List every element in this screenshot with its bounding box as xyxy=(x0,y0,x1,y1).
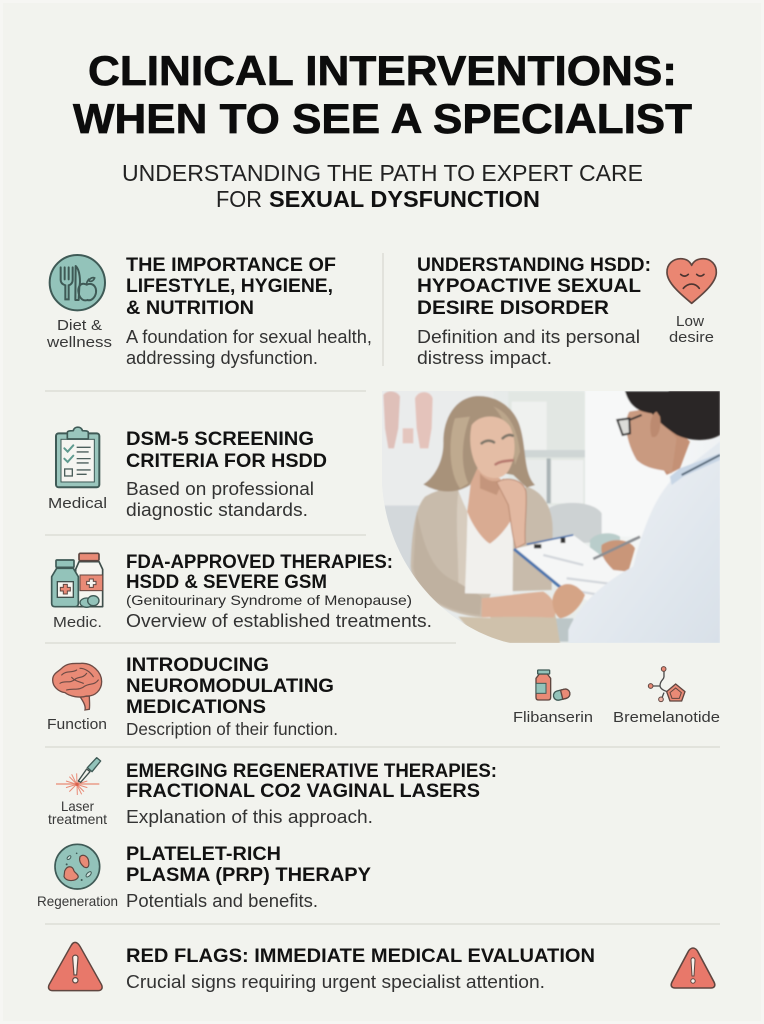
icon label: diet and wellness: Diet & xyxy=(57,318,102,334)
icon: regeneration cell xyxy=(55,844,100,889)
heading: lasers: EMERGING REGENERATIVE THERAPIES: xyxy=(126,761,497,782)
icon: medication bottles xyxy=(52,553,103,607)
panel: FDA-approved therapies xyxy=(52,552,432,631)
panel: red flags xyxy=(49,942,715,992)
label: bremelanotide: Bremelanotide xyxy=(613,710,720,726)
heading: HSDD: UNDERSTANDING HSDD: xyxy=(417,255,651,276)
heading: lifestyle: THE IMPORTANCE OF xyxy=(126,255,336,276)
cardigan xyxy=(411,487,553,617)
text: lasers description: Explanation of this approach. xyxy=(126,807,373,827)
icon label: low desire: desire xyxy=(669,330,714,346)
heading: HSDD: HYPOACTIVE SEXUAL xyxy=(417,276,641,297)
panel: lifestyle, hygiene and nutrition xyxy=(46,255,372,368)
icon label: low desire: Low xyxy=(676,314,705,330)
heading: neuromodulating medications: NEUROMODULATING xyxy=(126,676,334,697)
heading: FDA-approved therapies: FDA-APPROVED THERAPIES: xyxy=(126,552,393,573)
trousers xyxy=(458,612,560,643)
icon label: laser treatment xyxy=(48,798,107,827)
title: WHEN TO SEE A SPECIALIST xyxy=(73,95,692,142)
glasses xyxy=(617,415,642,435)
white top xyxy=(465,512,513,594)
text: DSM-5 description xyxy=(126,479,314,520)
text: HSDD description: Definition and its personal xyxy=(417,327,640,347)
heading: lasers: FRACTIONAL CO2 VAGINAL LASERS xyxy=(126,781,480,802)
heading: lasers xyxy=(126,761,497,802)
panel: neuromodulating medications xyxy=(47,655,720,739)
face xyxy=(470,416,515,478)
icon label: diet and wellness xyxy=(46,318,112,351)
text: lifestyle description: addressing dysfunction. xyxy=(126,348,318,368)
panel: DSM-5 screening criteria xyxy=(48,427,327,520)
heading: FDA-approved therapies: HSDD & SEVERE GSM xyxy=(126,572,327,593)
shadow under chin xyxy=(480,473,504,495)
clipboard xyxy=(516,535,622,600)
subtitle: SEXUAL DYSFUNCTION xyxy=(269,186,540,212)
text: lifestyle description: A foundation for sexual health, xyxy=(126,327,372,347)
text: PRP description: Potentials and benefits. xyxy=(126,891,318,911)
text: FDA description: Overview of established treatments. xyxy=(126,611,432,631)
icon label: medic: Medic. xyxy=(53,615,102,631)
heading: lifestyle xyxy=(126,255,336,319)
doctor hair xyxy=(625,391,720,440)
subtitle: UNDERSTANDING THE PATH TO EXPERT CARE xyxy=(122,160,643,186)
photo: patient consulting with doctor xyxy=(380,385,727,652)
icon label: low desire xyxy=(669,314,714,346)
icon: warning triangle left xyxy=(49,942,102,991)
text: neuromodulating description: Description of their function. xyxy=(126,719,338,739)
text: red flags description: Crucial signs requiring urgent specialist attention. xyxy=(126,972,545,992)
subtitle: FOR xyxy=(216,186,262,212)
neck and chest xyxy=(467,467,513,544)
icon label: medical: Medical xyxy=(48,496,107,512)
heading: DSM-5: DSM-5 SCREENING xyxy=(126,429,314,450)
heading: lifestyle: & NUTRITION xyxy=(126,298,254,319)
heading: PRP xyxy=(126,844,371,886)
text: DSM-5 description: diagnostic standards. xyxy=(126,500,308,520)
text: HSDD description xyxy=(417,327,640,368)
icon: bremelanotide molecule xyxy=(648,667,685,702)
hand on lap xyxy=(482,592,556,618)
text: HSDD description: distress impact. xyxy=(417,348,552,368)
subtitle xyxy=(122,160,643,212)
text: GSM definition: (Genitourinary Syndrome of Menopause) xyxy=(126,592,412,608)
title xyxy=(73,47,692,142)
heading: neuromodulating medications: MEDICATIONS xyxy=(126,697,266,718)
label: flibanserin: Flibanserin xyxy=(513,710,593,726)
doctor's hand and pen xyxy=(601,540,635,572)
panel: understanding HSDD xyxy=(417,255,716,368)
heading: neuromodulating medications: INTRODUCING xyxy=(126,655,269,676)
heading: DSM-5 xyxy=(126,429,327,472)
icon label: function: Function xyxy=(47,717,107,733)
icon: warning triangle right xyxy=(671,948,715,988)
panel: fractional CO2 vaginal lasers xyxy=(48,758,497,827)
icon: flibanserin bottle and capsule xyxy=(536,670,571,701)
icon: clipboard checklist xyxy=(56,427,99,487)
heading: FDA-approved therapies xyxy=(126,552,393,593)
icon: diet and wellness xyxy=(50,255,105,310)
text: DSM-5 description: Based on professional xyxy=(126,479,314,499)
heading: DSM-5: CRITERIA FOR HSDD xyxy=(126,451,327,472)
hair xyxy=(423,396,535,491)
hand under chin xyxy=(497,479,526,548)
icon label: laser treatment: treatment xyxy=(48,811,107,827)
heading: HSDD: DESIRE DISORDER xyxy=(417,298,609,319)
heading: PRP: PLASMA (PRP) THERAPY xyxy=(126,865,371,886)
doctor coat xyxy=(568,442,720,643)
icon: sad heart xyxy=(667,259,716,303)
icon label: regeneration: Regeneration xyxy=(37,893,118,909)
heading: PRP: PLATELET-RICH xyxy=(126,844,281,865)
heading: lifestyle: LIFESTYLE, HYGIENE, xyxy=(126,276,333,297)
title: CLINICAL INTERVENTIONS: xyxy=(88,47,677,94)
heading: red flags: RED FLAGS: IMMEDIATE MEDICAL EVALUATION xyxy=(126,946,595,967)
doctor neck and face xyxy=(664,430,691,476)
icon: laser xyxy=(56,758,101,795)
icon label: diet and wellness: wellness xyxy=(46,335,112,351)
panel: platelet-rich plasma therapy xyxy=(37,844,371,911)
text: lifestyle description xyxy=(126,327,372,368)
heading: neuromodulating medications xyxy=(126,655,334,718)
icon: brain xyxy=(53,663,102,710)
heading: HSDD xyxy=(417,255,651,319)
icon label: laser treatment: Laser xyxy=(61,798,94,814)
sofa xyxy=(380,506,423,598)
